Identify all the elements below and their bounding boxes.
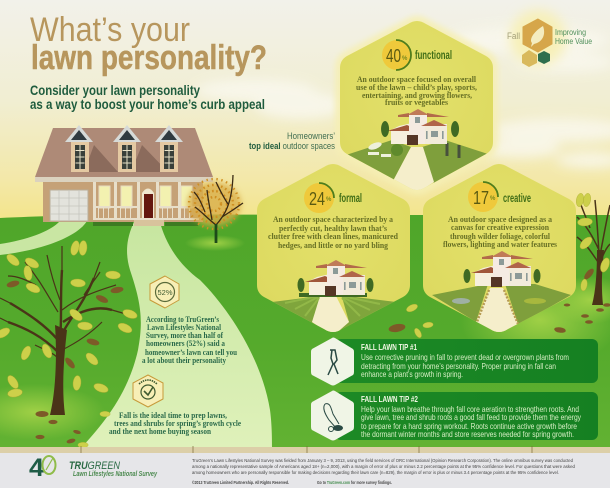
formal description: An outdoor space characterized by a bbox=[273, 215, 393, 224]
24 percent gauge bbox=[304, 183, 334, 213]
fall improving home value badge bbox=[507, 10, 592, 67]
tip 1 hexagon icon bbox=[311, 338, 354, 386]
leaf icon bbox=[531, 26, 544, 47]
footer panel bbox=[0, 446, 610, 488]
52 percent badge bbox=[150, 276, 179, 308]
52 percent badge: 52% bbox=[157, 288, 173, 297]
panel: functional 40% bbox=[340, 21, 493, 193]
front door bbox=[142, 188, 154, 222]
formal description: clutter free with clean lines, manicured bbox=[268, 232, 399, 241]
formal lawn scene bbox=[273, 293, 394, 332]
creative label: creative bbox=[503, 191, 531, 205]
methodology note bbox=[192, 458, 576, 475]
website link: Go to TruGreen.com for more survey findings. bbox=[317, 480, 392, 485]
40th anniversary logo bbox=[29, 454, 56, 482]
shrubs bbox=[381, 121, 459, 137]
lawn highlights bbox=[0, 235, 610, 440]
functional description: An outdoor space focused on overall bbox=[357, 75, 477, 84]
survey statement: Lawn Lifestyles National bbox=[147, 323, 222, 332]
panel: creative 17% bbox=[423, 164, 576, 336]
40 percent gauge: % bbox=[402, 56, 408, 62]
fall timing statement: trees and shrubs for spring’s growth cycle bbox=[114, 419, 241, 428]
40 percent gauge: 40 bbox=[386, 46, 401, 66]
formal description bbox=[268, 215, 399, 250]
tip 1 text bbox=[361, 353, 569, 379]
subtitle bbox=[30, 83, 265, 112]
functional description: entertaining, and growing flowers, bbox=[362, 91, 472, 100]
functional label: functional bbox=[415, 48, 452, 62]
functional description: use of the lawn – child’s play, sports, bbox=[356, 83, 477, 92]
creative description: flowers, lighting and water features bbox=[443, 240, 557, 249]
fall label: Fall bbox=[507, 31, 520, 41]
panel: fall lawn tip 2 bbox=[311, 390, 598, 440]
dormers bbox=[65, 125, 183, 172]
porch railing and posts bbox=[93, 182, 199, 220]
clock badge bbox=[133, 375, 163, 407]
improving home value label bbox=[555, 27, 592, 46]
garage door bbox=[50, 190, 88, 221]
trunk bbox=[50, 325, 67, 415]
shield hexagon bbox=[538, 51, 550, 64]
subtitle: Consider your lawn personality bbox=[30, 83, 200, 98]
survey statement: a lot about their personality bbox=[142, 356, 226, 365]
fall timing statement: and the next home buying season bbox=[109, 427, 211, 436]
small autumn tree bbox=[187, 175, 243, 243]
hexagon halo bbox=[340, 21, 493, 190]
tip 2 hexagon icon bbox=[311, 390, 354, 440]
creative lawn scene bbox=[432, 284, 571, 336]
formal shrubs bbox=[298, 278, 374, 292]
survey statement: Survey, more than half of bbox=[146, 331, 223, 340]
garden path bbox=[82, 222, 272, 447]
methodology note: among a nationally representative sample of Americans aged 18+ (n=2,000), with a margin of error of plus or minus 2.2 percentage points at the 95% confidence level. For questions that were asked bbox=[192, 464, 576, 469]
survey statement bbox=[142, 315, 237, 365]
functional description: fruits or vegetables bbox=[385, 98, 448, 107]
formal description: hedges, and little or no yard bling bbox=[278, 241, 388, 250]
methodology note: among homeowners who are personally responsible for making decisions regarding their lawn care (n=829), the margin of error is plus or minus 3.4 percentage points at the 95% confidence level. bbox=[192, 470, 559, 475]
eaves bbox=[35, 177, 213, 182]
lawn ground bbox=[0, 214, 610, 447]
40th anniversary logo: 4 bbox=[29, 454, 44, 482]
functional description bbox=[356, 75, 477, 107]
tip 1 text: detracting from your home’s personality. Proper pruning in fall can bbox=[361, 362, 556, 371]
creative description: canvas for creative expression bbox=[451, 223, 550, 232]
24 percent gauge: % bbox=[326, 197, 332, 203]
creative description: An outdoor space designed as a bbox=[448, 215, 552, 224]
survey name: Lawn Lifestyles National Survey bbox=[73, 471, 158, 478]
tip 2 heading: FALL LAWN TIP #2 bbox=[361, 395, 418, 404]
functional house bbox=[387, 109, 449, 145]
17 percent gauge bbox=[468, 182, 498, 212]
sky background bbox=[0, 0, 610, 225]
TruGreen logo: TRUGREEN bbox=[69, 460, 120, 472]
17 percent gauge: % bbox=[490, 196, 496, 202]
porch windows bbox=[99, 186, 192, 208]
methodology note: TruGreen’s Lawn Lifestyles National Survey was fielded from January 3 – 9, 2013, using the field services of ORC International (Opinion Research Corporation). The online omnibus survey was conducted bbox=[192, 458, 574, 463]
improving home value label: Home Value bbox=[555, 36, 592, 46]
formal description: perfectly cut, healthy lawn that’s bbox=[279, 224, 387, 233]
house bbox=[35, 125, 213, 226]
creative description bbox=[443, 215, 557, 249]
tip 1 heading: FALL LAWN TIP #1 bbox=[361, 343, 417, 352]
improving home value label: Improving bbox=[555, 27, 586, 37]
house walls bbox=[43, 182, 203, 222]
homeowners top ideal label: Homeowners’ bbox=[287, 131, 335, 141]
creative house bbox=[471, 251, 533, 287]
subtitle: as a way to boost your home’s curb appeal bbox=[30, 97, 265, 112]
tip 2 text bbox=[361, 405, 582, 439]
40 percent gauge bbox=[382, 40, 412, 70]
porch step bbox=[134, 220, 164, 226]
panel: formal 24% bbox=[257, 164, 410, 336]
main hexagon with leaf bbox=[523, 19, 552, 52]
formal house bbox=[305, 260, 367, 296]
homeowners top ideal label bbox=[249, 131, 335, 151]
homeowners top ideal label: top ideal outdoor spaces bbox=[249, 141, 335, 151]
survey statement: According to TruGreen’s bbox=[146, 315, 219, 324]
17 percent gauge: 17 bbox=[473, 188, 489, 208]
survey statement: homeowners (52%) said a bbox=[146, 339, 225, 348]
panel: fall lawn tip 1 bbox=[311, 338, 598, 386]
title bbox=[30, 11, 267, 77]
driveway bbox=[0, 221, 87, 255]
large tree left bbox=[0, 240, 138, 448]
house roof bbox=[35, 128, 213, 177]
gear hexagon bbox=[522, 50, 537, 67]
creative shrubs bbox=[464, 269, 540, 283]
24 percent gauge: 24 bbox=[309, 189, 325, 209]
formal label: formal bbox=[339, 191, 362, 205]
tip 1 text: enhance a plant’s growth in spring. bbox=[361, 370, 463, 379]
creative description: through wilder foliage, colorful bbox=[450, 232, 551, 241]
fall timing statement bbox=[109, 411, 241, 436]
title: lawn personality? bbox=[31, 39, 267, 77]
leaves on tree bbox=[0, 240, 138, 448]
hedges bbox=[93, 222, 198, 226]
copyright: ©2013 TruGreen Limited Partnership. All Rights Reserved. bbox=[192, 480, 289, 485]
clouds bbox=[195, 26, 610, 168]
tip 1 text: Use corrective pruning in fall to prevent dead or overgrown plants from bbox=[361, 353, 569, 362]
title: What’s your bbox=[30, 11, 190, 49]
fine branches bbox=[0, 246, 126, 358]
survey statement: homeowner’s lawn can tell you bbox=[145, 348, 237, 357]
functional lawn scene bbox=[348, 140, 487, 190]
main branches bbox=[8, 270, 112, 352]
large tree right bbox=[388, 193, 610, 339]
fall timing statement: Fall is the ideal time to prep lawns, bbox=[119, 411, 227, 420]
